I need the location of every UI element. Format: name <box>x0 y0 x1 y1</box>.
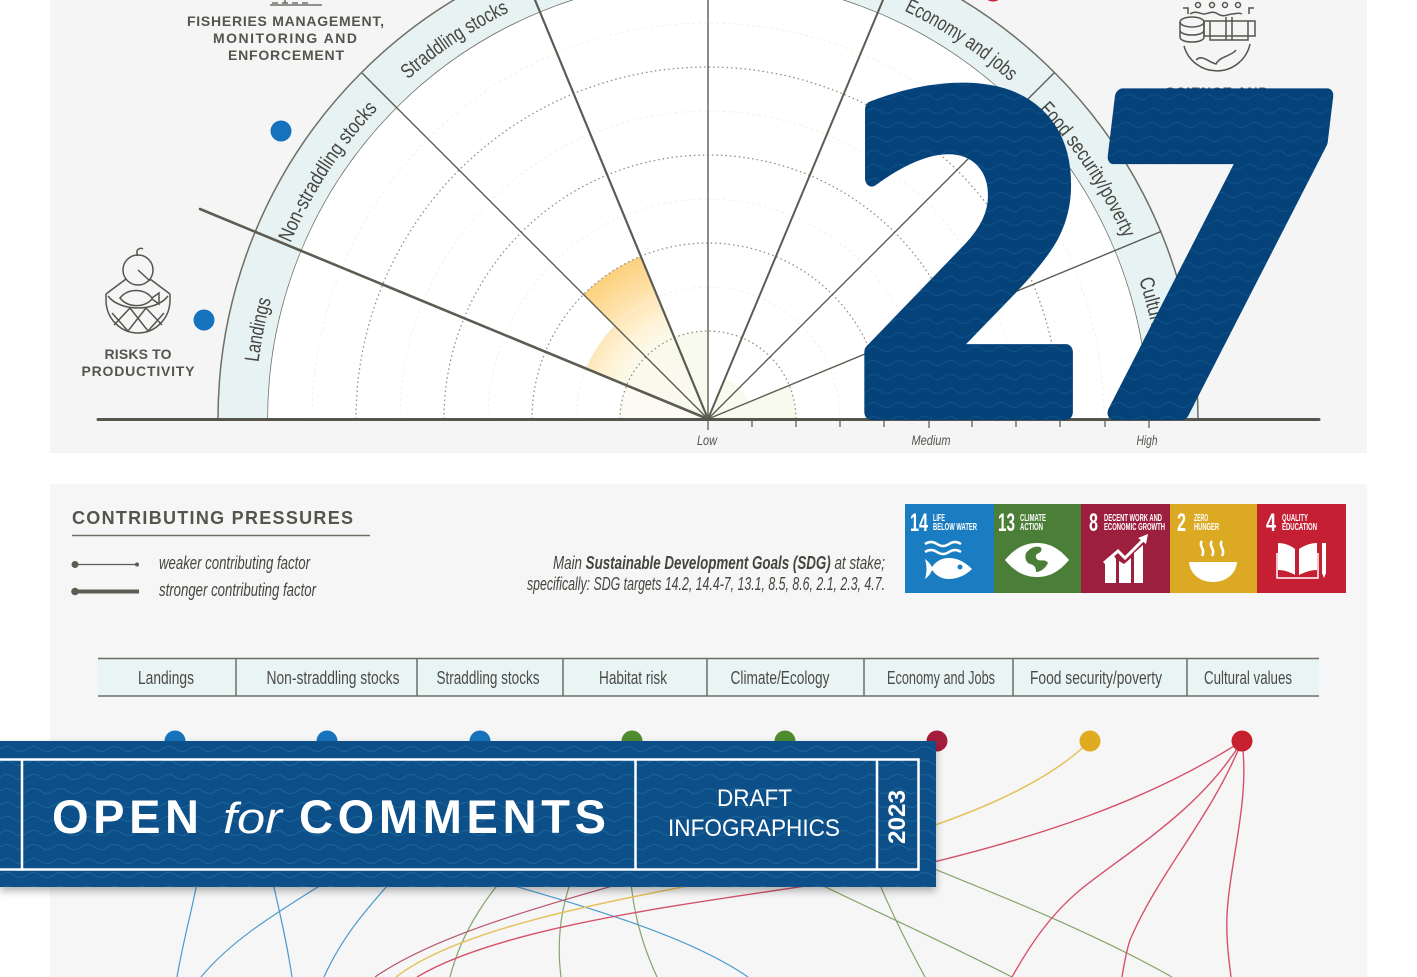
legend: weaker factor <box>72 553 311 573</box>
table header: pressure categories: Economy and Jobs <box>887 668 995 688</box>
text: main SDGs at stake <box>527 553 885 594</box>
score sector: landings <box>620 385 708 419</box>
legend: stronger factor <box>71 580 317 600</box>
band labels: Landings <box>244 298 272 361</box>
red connectors <box>417 741 1244 977</box>
SDG tile: 2 zero hunger: 2 <box>1177 509 1186 537</box>
big number 27: 2 <box>842 10 1098 514</box>
dot: top red <box>982 0 1004 2</box>
axis ticks <box>708 419 1149 430</box>
table header: pressure categories: Climate/Ecology <box>730 668 830 688</box>
SDG tile: 4 quality education: QUALITY <box>1282 512 1308 524</box>
text: main SDGs at stake: Main Sustainable Development Goals (SDG) at stake; <box>553 553 885 573</box>
axis labels: Low <box>697 432 718 448</box>
heading: contributing pressures: CONTRIBUTING PRESSURES <box>72 508 353 528</box>
dot: productivity blue <box>194 310 214 330</box>
heading: risks to productivity: RISKS TO <box>104 346 172 362</box>
chart interior <box>268 0 1148 419</box>
big number 27 <box>842 10 1366 515</box>
banner title: COMMENTS <box>299 790 606 843</box>
SDG tile: 2 zero hunger: HUNGER <box>1194 521 1219 533</box>
heading: risks to productivity <box>82 346 195 379</box>
SDG tile: 2 zero hunger <box>1170 504 1257 593</box>
SDG tile: 8 decent work: DECENT WORK AND <box>1104 512 1162 524</box>
heading: fisheries management <box>187 13 384 63</box>
heading: risks to productivity: PRODUCTIVITY <box>82 363 195 379</box>
banner title: OPEN <box>52 790 199 843</box>
baseline axis <box>98 418 1319 421</box>
SDG tile: 13 climate action: 13 <box>998 509 1015 537</box>
heading: science and knowledge (behind numeral): SCIENCE AND <box>1166 84 1268 100</box>
band labels: Cultural values <box>1140 278 1160 326</box>
green connectors <box>450 855 1172 977</box>
heading: fisheries management: MONITORING AND <box>213 30 357 46</box>
connector curves <box>177 741 1244 977</box>
banner year: 2023 <box>884 790 911 844</box>
table header: pressure categories: Non-straddling stocks <box>266 668 400 688</box>
SDG tile: 4 quality education: EDUCATION <box>1282 521 1317 533</box>
blue connectors <box>177 860 748 977</box>
dark red connector <box>375 860 700 977</box>
table header: pressure categories: Straddling stocks <box>436 668 540 688</box>
outer label band <box>218 0 1198 419</box>
band labels <box>244 0 1160 361</box>
table header: pressure categories: Habitat risk <box>599 668 668 688</box>
banner title: for <box>223 794 285 843</box>
legend: weaker factor: weaker contributing factor <box>159 553 311 573</box>
heading: fisheries management: ENFORCEMENT <box>228 47 344 63</box>
panel: contributing pressures background <box>50 484 1367 977</box>
band labels: Food security/poverty <box>1041 100 1134 236</box>
table header: pressure categories: Cultural values <box>1204 668 1292 688</box>
score sector: food security <box>708 385 796 419</box>
score sector: economy and jobs <box>708 378 749 419</box>
dotted rings <box>356 67 1060 419</box>
banner subtitle: INFOGRAPHICS <box>668 815 840 842</box>
icon: fisheries management <box>270 0 322 5</box>
text: main SDGs at stake: specifically: SDG targets 14.2, 14.4-7, 13.1, 8.5, 8.6, 2.1, 2.3, 4.7. <box>527 574 885 594</box>
faint rings <box>312 23 1104 419</box>
SDG tile: 4 quality education <box>1257 504 1346 593</box>
banner subtitle: DRAFT <box>717 785 792 812</box>
SDG tile: 14 life below water <box>905 504 994 593</box>
SDG tile: 8 decent work: ECONOMIC GROWTH <box>1104 521 1165 533</box>
table header: pressure categories: Food security/poverty <box>1030 668 1162 688</box>
SDG tile: 8 decent work: 8 <box>1089 509 1098 537</box>
radial lines <box>200 0 1161 419</box>
SDG tile: 4 quality education: 4 <box>1266 509 1276 537</box>
heading: fisheries management: FISHERIES MANAGEMENT, <box>187 13 384 29</box>
banner subtitle <box>668 785 840 842</box>
banner frame <box>0 760 918 870</box>
banner title <box>52 790 606 843</box>
radar chart <box>96 0 1320 448</box>
gold connector <box>396 741 1090 977</box>
table header: pressure categories: Landings <box>138 668 194 688</box>
icon: science and knowledge <box>1180 2 1255 71</box>
legend: stronger factor: stronger contributing factor <box>159 580 317 600</box>
table header: pressure categories <box>98 658 1319 696</box>
axis labels <box>697 432 1158 448</box>
dot: fisheries blue <box>270 120 292 142</box>
band labels: Non-straddling stocks <box>278 103 376 242</box>
SDG tile: 13 climate action <box>994 504 1081 593</box>
icon: risks to productivity <box>106 248 170 333</box>
score sector: straddling stocks <box>584 256 708 419</box>
SDG tile: 13 climate action: ACTION <box>1020 521 1043 533</box>
panel: top radar chart background <box>50 0 1367 453</box>
banner: open for comments <box>0 741 936 887</box>
SDG tile: 13 climate action: CLIMATE <box>1020 512 1046 524</box>
score sector: non-straddling stocks <box>586 326 708 419</box>
pressure dots <box>164 730 1252 752</box>
axis labels: Medium <box>912 432 951 448</box>
score sector: habitat risk <box>674 331 708 419</box>
SDG tile: 14 life below water: BELOW WATER <box>933 521 977 533</box>
SDG tile: 14 life below water: 14 <box>910 509 928 537</box>
SDG tile: 14 life below water: LIFE <box>933 512 945 524</box>
SDG tile: 2 zero hunger: ZERO <box>1194 512 1208 524</box>
axis labels: High <box>1136 432 1158 448</box>
SDG tile: 8 decent work <box>1081 504 1170 593</box>
big number 27: 7 <box>1047 10 1366 515</box>
